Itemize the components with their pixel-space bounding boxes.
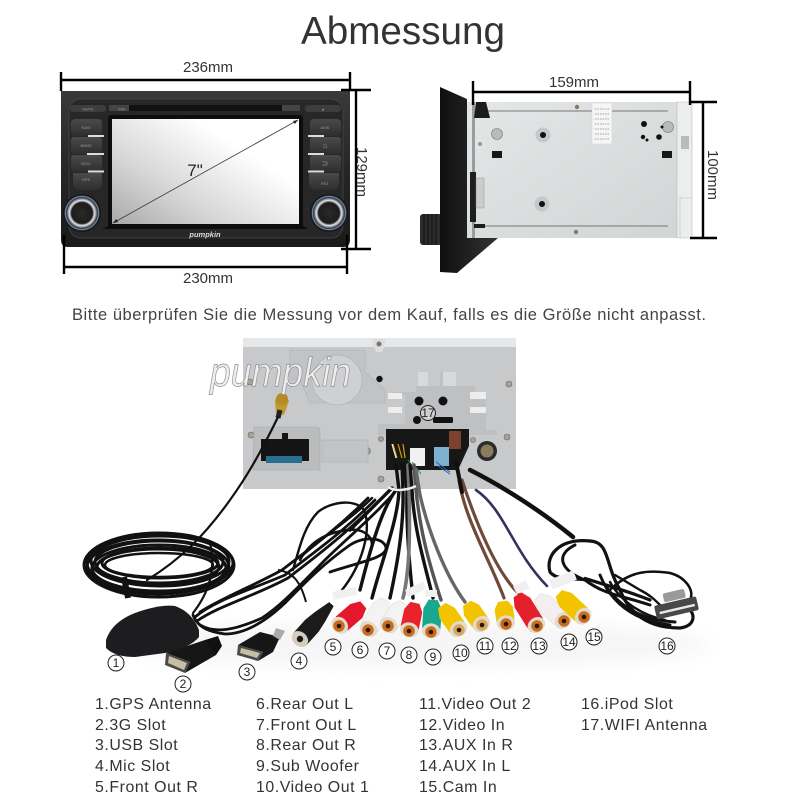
callout numbers: 7	[384, 644, 391, 658]
coil rings	[84, 533, 234, 597]
legend column 2: 6.Rear Out L	[256, 696, 354, 713]
left buttons: NAVI	[81, 125, 91, 130]
legend column 2: 7.Front Out L	[256, 717, 357, 734]
chassis details	[473, 111, 668, 226]
label 17: 17	[421, 406, 435, 420]
screen	[112, 119, 299, 224]
left buttons: GPS	[82, 177, 91, 182]
dimension: width 230mm	[64, 235, 347, 287]
top slot row: MUTE	[82, 106, 94, 112]
legend column 3: 14.AUX In L	[419, 758, 511, 775]
ipod cable coil	[590, 541, 693, 628]
icon: gps puck	[106, 606, 199, 657]
embossed vent area	[378, 372, 497, 435]
legend column 2: 9.Sub Woofer	[256, 758, 360, 775]
top slot row: MIC	[118, 106, 126, 112]
dimension: depth 159mm	[473, 74, 690, 105]
brand on front: pumpkin	[188, 230, 221, 239]
callout numbers: 1	[113, 656, 120, 670]
connectors: rca plugs	[328, 570, 595, 640]
legend column 2	[256, 696, 369, 796]
dimension: height 129mm: 129mm	[353, 147, 370, 197]
plug 15 yellow	[552, 587, 595, 628]
plug 8 red	[399, 601, 424, 639]
legend column 3: 11.Video Out 2	[419, 696, 531, 713]
plug 6 white	[357, 596, 393, 640]
embossed circle	[290, 350, 385, 405]
plug 7 white	[377, 598, 411, 636]
soft ground shadow	[130, 623, 710, 667]
callout numbers: 14	[562, 635, 576, 649]
diagonal size arrow	[113, 120, 298, 223]
plug 10 yellow	[434, 600, 470, 640]
diagonal size arrow: 7"	[187, 161, 203, 180]
callout numbers: 3	[244, 665, 251, 679]
callout numbers: 9	[430, 650, 437, 664]
plug 5 red	[328, 598, 369, 637]
plug 11 yellow	[459, 598, 493, 635]
plug 13 red	[510, 590, 548, 636]
gps cable and coil	[84, 417, 278, 613]
tag labels	[332, 570, 577, 600]
legend column 4: 16.iPod Slot	[581, 696, 673, 713]
rear flange	[677, 102, 692, 238]
plug 12 yellow	[494, 600, 516, 632]
mounting holes	[478, 105, 674, 234]
right knob	[310, 194, 348, 232]
legend column 1: 1.GPS Antenna	[95, 696, 212, 713]
icon: ipod connector	[652, 586, 699, 620]
right buttons: ⊃	[322, 159, 328, 168]
panel: side view of head unit	[420, 87, 692, 273]
right buttons	[308, 119, 341, 190]
caption: Bitte überprüfen Sie die Messung vor dem Kauf, falls es die Größe nicht anpasst.	[72, 306, 706, 324]
legend column 3	[419, 696, 531, 796]
bundled rca cables	[350, 462, 693, 628]
left buttons	[71, 119, 104, 190]
callout numbers: 16	[660, 639, 674, 653]
dimension: height 100mm	[690, 102, 721, 238]
antenna socket	[477, 441, 497, 461]
legend column 4: 17.WIFI Antenna	[581, 717, 708, 734]
power socket	[253, 427, 320, 470]
knob	[420, 214, 442, 245]
screen bezel	[103, 115, 309, 229]
plug 14 white	[531, 590, 575, 632]
watermark: brand: pumpkin	[208, 349, 351, 395]
brown and purple cables	[459, 480, 504, 598]
callout numbers: 5	[330, 640, 337, 654]
callout numbers: 10	[454, 646, 468, 660]
icon: mic jack	[289, 598, 338, 650]
left buttons: DISC	[81, 161, 91, 166]
callout numbers: 2	[180, 677, 187, 691]
right buttons: AMS	[321, 125, 330, 130]
dimension: height 100mm: 100mm	[704, 150, 721, 200]
top slot row	[70, 105, 341, 112]
dimension: width 230mm: 230mm	[183, 270, 233, 287]
legend column 1: 2.3G Slot	[95, 717, 166, 734]
callout numbers: 4	[296, 654, 303, 668]
legend column 1: 5.Front Out R	[95, 779, 198, 796]
panel: rear plate of head unit	[208, 338, 516, 489]
connector block	[386, 429, 469, 474]
front fascia side	[440, 87, 498, 273]
top slot row: ▲	[321, 106, 325, 112]
dimension: width 236mm: 236mm	[183, 59, 233, 76]
usb cables coil	[193, 492, 395, 634]
legend column 3: 13.AUX In R	[419, 737, 513, 754]
callout numbers: 12	[503, 639, 517, 653]
callout numbers: 8	[406, 648, 413, 662]
callout numbers	[108, 629, 675, 692]
back plate	[243, 338, 516, 489]
cable tie	[278, 570, 306, 602]
icon: usb connector	[237, 628, 285, 661]
chassis plate	[467, 102, 678, 238]
right buttons: ⌂	[323, 141, 328, 150]
legend column 3: 12.Video In	[419, 717, 505, 734]
left buttons: BAND	[80, 143, 92, 148]
panel: front view of head unit	[61, 91, 350, 247]
dimension: height 129mm	[341, 90, 371, 249]
dimension: width 236mm	[61, 59, 350, 91]
callout numbers: 11	[479, 639, 492, 653]
icon: usb connector slot	[165, 636, 222, 673]
plug 9 teal	[421, 599, 442, 639]
device body front	[61, 91, 350, 247]
legend column 3: 15.Cam In	[419, 779, 497, 796]
legend column 1: 4.Mic Slot	[95, 758, 170, 775]
gps antenna socket	[275, 393, 289, 418]
dimension: depth 159mm: 159mm	[549, 74, 599, 91]
legend column 4	[581, 696, 708, 734]
legend column 2: 8.Rear Out R	[256, 737, 356, 754]
label sticker	[592, 103, 612, 144]
legend column 1	[95, 696, 212, 796]
cable tie	[388, 486, 416, 490]
left knob	[63, 194, 101, 232]
right buttons: RST	[321, 181, 330, 186]
callout numbers: 13	[532, 639, 546, 653]
legend column 1: 3.USB Slot	[95, 737, 178, 754]
screws	[247, 379, 512, 482]
legend column 2: 10.Video Out 1	[256, 779, 369, 796]
callout numbers: 15	[587, 630, 601, 644]
title: Abmessung	[301, 10, 505, 53]
callout numbers: 6	[357, 643, 364, 657]
